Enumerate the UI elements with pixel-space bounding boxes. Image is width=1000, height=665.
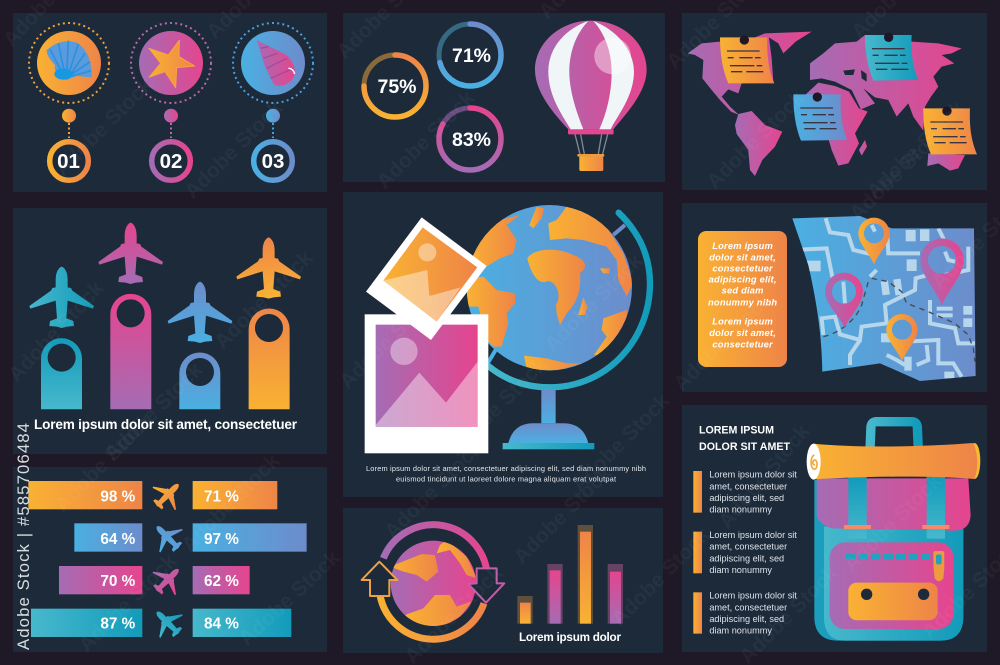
heading: DOLOR SIT AMET	[699, 441, 790, 453]
bar row 2	[74, 515, 307, 560]
shell step 01	[29, 23, 109, 180]
photo: purple landscape	[365, 314, 488, 453]
icon: backpack	[807, 422, 980, 641]
callout: orange text box: dolor sit amet,	[709, 252, 776, 262]
watermark text: Adobe Stock	[74, 549, 182, 657]
watermark text: Adobe Stock	[839, 469, 947, 577]
icon: globe with exchange arrows	[362, 525, 504, 639]
list item 1: amet, consectetuer	[709, 481, 787, 491]
bar row 4	[31, 600, 291, 645]
heading	[699, 424, 790, 453]
shell step 01: 01	[57, 150, 80, 173]
text block: Lorem ipsum dolor sit amet, consectetuer adipiscing elit, sed diam nonummy nibh	[366, 464, 646, 473]
photo: orange landscape	[366, 217, 487, 340]
list item 1	[693, 469, 797, 515]
watermark text: Adobe Stock	[862, 96, 970, 204]
watermark text: Adobe Stock	[335, 286, 443, 394]
callout: orange text box: Lorem ipsum	[712, 241, 773, 251]
list item 2: amet, consectetuer	[709, 542, 787, 552]
watermark text: Adobe Stock	[4, 277, 108, 386]
bar row 3: 70 %	[100, 573, 136, 590]
progress ring 75%	[364, 55, 426, 117]
watermark text: Adobe Stock	[372, 86, 480, 194]
watermark text: Adobe Stock	[210, 246, 318, 354]
shell step 02: 02	[160, 150, 182, 173]
list item 1: Lorem ipsum dolor sit	[709, 469, 797, 479]
watermark text: Adobe Stock	[380, 436, 488, 544]
watermark text: Adobe Stock	[714, 420, 815, 533]
list item 2: Lorem ipsum dolor sit	[709, 530, 797, 540]
watermark text: Adobe Stock	[567, 389, 675, 497]
shell step 03	[233, 23, 313, 180]
icon: starfish	[149, 40, 195, 88]
folded city map	[792, 216, 976, 381]
bar row 3: 62 %	[204, 573, 239, 590]
bar row 2: 64 %	[100, 531, 136, 548]
shell step 02	[131, 23, 211, 180]
chart caption: Lorem ipsum dolor	[519, 631, 621, 644]
icon: scallop shell	[47, 41, 92, 80]
tag and plane 3	[168, 282, 232, 409]
progress ring 83%: 83%	[452, 129, 491, 151]
watermark text: Adobe Stock	[50, 409, 158, 517]
bar row 4: 87 %	[100, 615, 136, 632]
watermark text: Adobe Stock	[540, 249, 648, 357]
callout: orange text box	[698, 231, 787, 367]
stock id vertical label: Adobe Stock | #585706484	[14, 423, 33, 650]
pin: large pink	[920, 238, 964, 305]
callout: orange text box: consectetuer	[712, 263, 774, 273]
watermark text: Adobe Stock	[509, 461, 617, 569]
list item 3	[693, 591, 797, 636]
panel: percentage bars with planes	[13, 467, 327, 652]
shell step 03: 03	[262, 150, 284, 173]
watermark text: Adobe Stock	[235, 546, 345, 651]
pin: medium pink	[825, 273, 863, 328]
sticky note: orange	[923, 106, 977, 154]
caption: Lorem ipsum dolor sit amet, consectetuer	[34, 417, 298, 432]
bar row 3	[59, 558, 250, 602]
heading: LOREM IPSUM	[699, 424, 774, 436]
callout: orange text box: dolor sit amet,	[709, 328, 776, 338]
list item 3: amet, consectetuer	[709, 602, 787, 612]
panel: world map with sticky notes	[682, 13, 987, 190]
progress ring 83%	[439, 108, 501, 170]
callout: orange text box: nonummy nibh	[708, 297, 777, 307]
sticky note: teal	[865, 33, 918, 81]
pin: orange top	[858, 218, 890, 264]
watermark text: Adobe Stock	[177, 449, 285, 557]
progress ring 71%: 71%	[452, 45, 491, 67]
pin: orange bottom	[886, 314, 918, 361]
watermark text: Adobe Stock	[50, 73, 158, 181]
tag and plane 2	[98, 223, 163, 409]
progress ring 75%: 75%	[377, 76, 417, 98]
desk globe	[467, 205, 650, 449]
bar row 1: 98 %	[100, 489, 136, 506]
list item 2: diam nonummy	[709, 565, 772, 575]
text block	[366, 464, 646, 484]
world map	[688, 32, 965, 176]
list item 3: Lorem ipsum dolor sit	[709, 591, 797, 601]
watermark text: Adobe Stock	[669, 288, 777, 396]
callout: orange text box: sed diam	[722, 286, 764, 296]
panel: progress rings and balloon	[343, 13, 665, 182]
sticky note: blue	[793, 92, 847, 141]
watermark text: Adobe Stock	[845, 118, 953, 226]
bar row 4: 84 %	[204, 615, 239, 632]
callout: orange text box: Lorem ipsum	[712, 317, 773, 327]
bar row 2: 97 %	[204, 531, 239, 548]
bar row 1: 71 %	[204, 489, 239, 506]
watermark text: Adobe Stock	[607, 523, 715, 631]
panel: rotating globe and bar chart	[343, 508, 663, 653]
list item 2: adipiscing elit, sed	[709, 553, 784, 563]
panel: globe and photos	[343, 192, 663, 497]
watermark text: Adobe Stock	[100, 358, 208, 466]
watermark text: Adobe Stock	[702, 86, 810, 194]
tag and plane 1	[29, 267, 94, 409]
watermark text: Adobe Stock	[180, 96, 288, 204]
list item 3: adipiscing elit, sed	[709, 614, 784, 624]
icon: cone shell	[257, 40, 295, 86]
bar chart	[517, 525, 623, 624]
sticky note: yellow	[720, 35, 774, 83]
panel: route map and pins	[682, 203, 987, 392]
list item 2	[693, 530, 797, 575]
tag and plane 4	[236, 237, 301, 409]
panel: backpack and list	[682, 405, 987, 652]
watermark text: Adobe Stock	[444, 353, 552, 461]
bar row 1	[28, 473, 277, 517]
panel: numbered sea shells	[13, 13, 327, 192]
list item 1: adipiscing elit, sed	[709, 493, 784, 503]
callout: orange text box: adipiscing elit,	[709, 274, 777, 284]
progress ring 71%	[439, 24, 501, 86]
text block: euismod tincidunt ut laoreet dolore magna aliquam erat volutpat	[396, 475, 616, 484]
list item 1: diam nonummy	[709, 505, 772, 515]
icon: hot air balloon	[535, 21, 647, 171]
callout: orange text box: consectetuer	[712, 339, 774, 349]
list item 3: diam nonummy	[709, 626, 772, 636]
panel: planes and door hanger tags	[13, 208, 327, 454]
